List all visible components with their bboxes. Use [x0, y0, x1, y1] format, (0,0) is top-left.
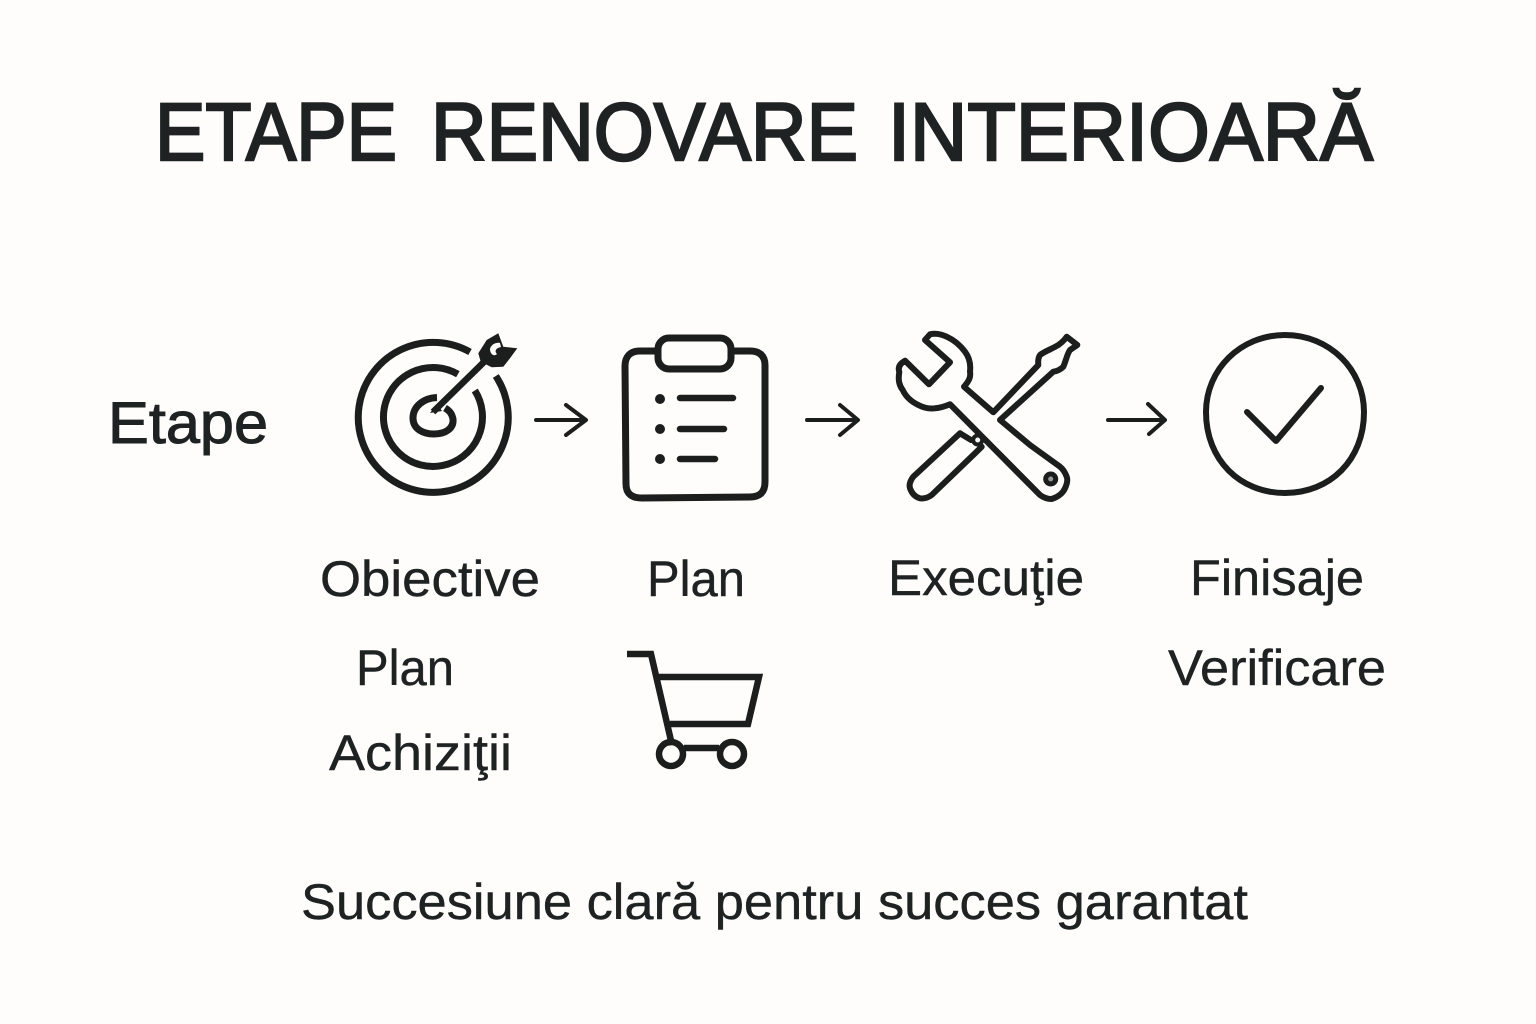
arrow: execution to finishes: [1108, 404, 1165, 434]
label: Achiziţii: Achiziţii: [329, 725, 512, 781]
row label: Etape: Etape: [108, 391, 268, 456]
label: Verificare: Verificare: [1168, 640, 1386, 696]
icon: shopping cart: [627, 654, 759, 766]
label: Plan: Plan: [647, 551, 745, 607]
icon: target with arrow: [358, 333, 517, 492]
icon: clipboard checklist: [625, 338, 765, 498]
title: RENOVARE: [431, 87, 858, 178]
arrow: plan to execution: [807, 405, 858, 435]
icon: crossed wrench and screwdriver: [899, 334, 1077, 499]
footer tagline: Succesiune clară pentru succes garantat: [301, 874, 1248, 930]
label: Plan second row: Plan: [356, 640, 454, 696]
title: INTERIOARĂ: [888, 87, 1373, 178]
label: Execuţie: Execuţie: [888, 550, 1084, 606]
icon: circle with check mark: [1206, 335, 1364, 493]
label: Obiective: Obiective: [320, 551, 540, 607]
title: ETAPE: [155, 87, 397, 178]
label: Finisaje: Finisaje: [1190, 550, 1364, 606]
arrow: objective to plan: [536, 405, 586, 435]
